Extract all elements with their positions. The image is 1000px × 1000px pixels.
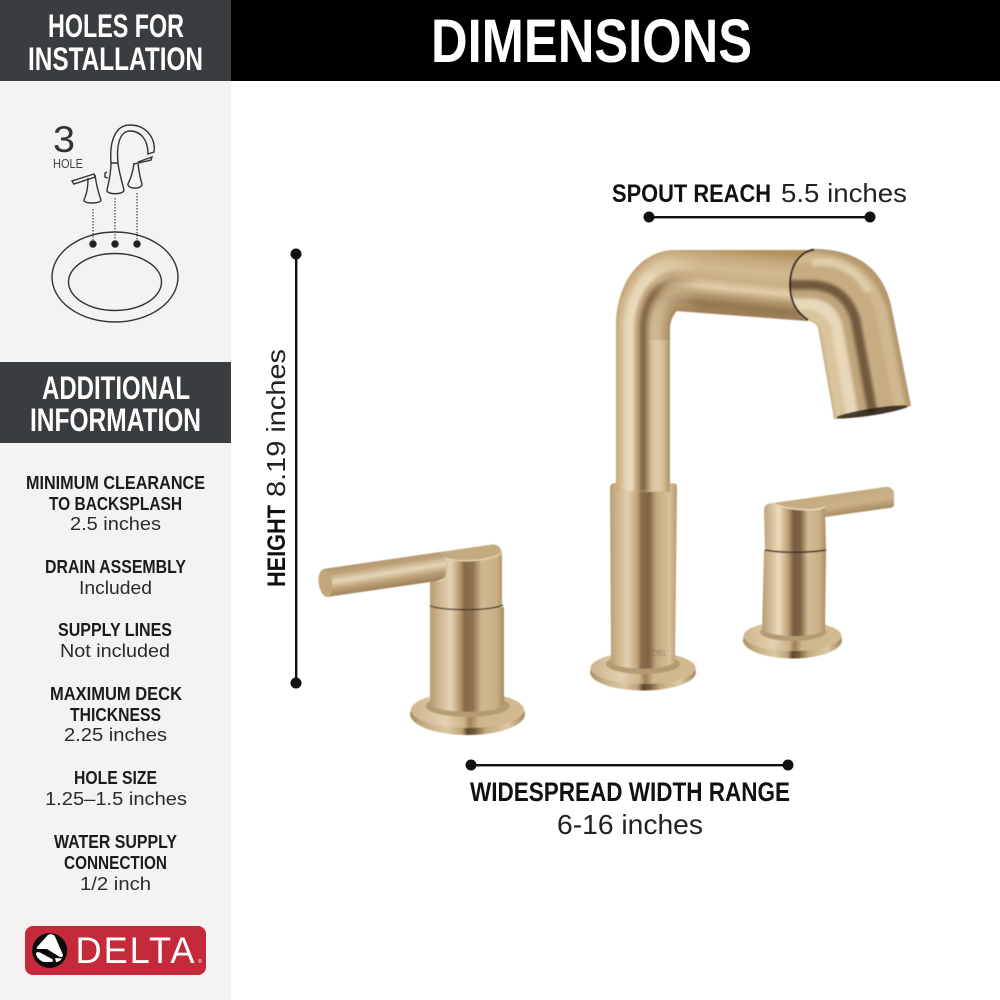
heading: holes for installation: HOLES FOR bbox=[48, 8, 184, 44]
heading: additional information: INFORMATION bbox=[30, 402, 201, 438]
logo: delta: DELTA bbox=[76, 930, 196, 971]
faucet photo: champagne bronze bbox=[317, 240, 915, 735]
hole count label: HOLE bbox=[53, 157, 83, 171]
spout riser and arm bbox=[615, 249, 809, 492]
left handle bbox=[317, 544, 525, 735]
spec: maximum deck thickness: 2.25 inches bbox=[64, 725, 167, 745]
arrow: spout reach measure bbox=[644, 212, 876, 222]
hole count label: 3 bbox=[53, 119, 75, 160]
right handle bbox=[743, 487, 894, 658]
logo: delta: ® bbox=[198, 958, 202, 965]
spec: maximum deck thickness bbox=[50, 684, 182, 745]
spec: maximum deck thickness: MAXIMUM DECK bbox=[50, 684, 182, 704]
dimension: widespread width range: WIDESPREAD WIDTH RANGE bbox=[470, 777, 790, 807]
arrow: height measure bbox=[290, 248, 302, 688]
spout body: DEL bbox=[652, 649, 668, 658]
sidebar background bbox=[0, 0, 231, 1000]
center spout bbox=[590, 240, 915, 690]
dimension: height: HEIGHT bbox=[263, 505, 291, 587]
spec: supply lines bbox=[58, 620, 172, 661]
spec: water supply connection: 1/2 inch bbox=[80, 874, 151, 894]
spout head bbox=[788, 248, 912, 420]
spec: hole size: HOLE SIZE bbox=[74, 768, 157, 788]
dimension: widespread width range bbox=[466, 760, 794, 840]
basin bbox=[52, 232, 178, 322]
title banner: dimensions bbox=[231, 0, 1000, 81]
faucet line drawing bbox=[72, 125, 154, 203]
arrow: width measure bbox=[466, 760, 794, 770]
spec: drain assembly bbox=[45, 557, 186, 598]
dotted alignment lines bbox=[93, 193, 137, 240]
dimension: spout reach: 5.5 inches bbox=[781, 178, 907, 208]
title banner: dimensions: DIMENSIONS bbox=[431, 7, 752, 75]
spec: minimum clearance: TO BACKSPLASH bbox=[49, 494, 182, 514]
dimension: spout reach: SPOUT REACH bbox=[612, 180, 771, 208]
spec: maximum deck thickness: THICKNESS bbox=[70, 705, 161, 725]
dimension: height: 8.19 inches bbox=[261, 349, 291, 497]
spec: hole size bbox=[45, 768, 187, 809]
spec: water supply connection: WATER SUPPLY bbox=[54, 832, 177, 852]
dimension: height bbox=[261, 248, 302, 688]
spec: minimum clearance bbox=[26, 473, 205, 534]
hole count label bbox=[53, 119, 83, 171]
spec: supply lines: Not included bbox=[60, 641, 170, 661]
spec: minimum clearance: 2.5 inches bbox=[70, 514, 161, 534]
spec: water supply connection: CONNECTION bbox=[64, 853, 167, 873]
heading: additional information: ADDITIONAL bbox=[42, 370, 190, 406]
icon: three hole faucet and basin diagram bbox=[52, 119, 178, 322]
spec: minimum clearance: MINIMUM CLEARANCE bbox=[26, 473, 205, 493]
heading: holes for installation: INSTALLATION bbox=[28, 41, 203, 77]
spec: hole size: 1.25–1.5 inches bbox=[45, 789, 187, 809]
logo: delta bbox=[25, 926, 206, 975]
heading: additional information bbox=[0, 362, 231, 443]
heading: holes for installation bbox=[0, 0, 231, 81]
spout body bbox=[590, 483, 696, 690]
spec: water supply connection bbox=[54, 832, 177, 894]
spec: drain assembly: DRAIN ASSEMBLY bbox=[45, 557, 186, 577]
spec: supply lines: SUPPLY LINES bbox=[58, 620, 172, 640]
dimension: widespread width range: 6-16 inches bbox=[557, 809, 703, 840]
spec: drain assembly: Included bbox=[79, 578, 152, 598]
dimension: spout reach bbox=[612, 178, 907, 222]
